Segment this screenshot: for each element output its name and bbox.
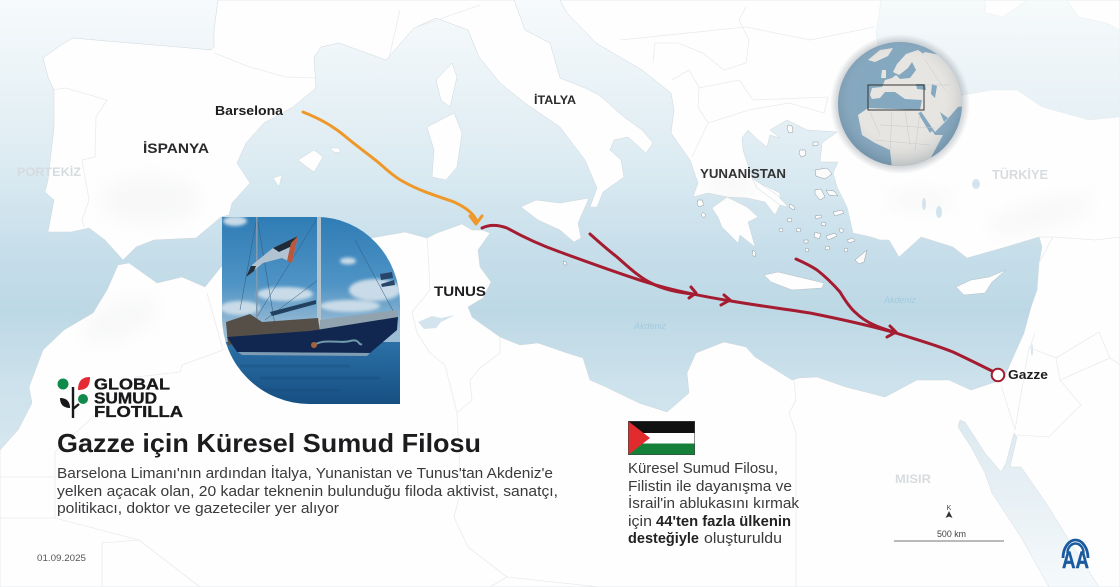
logo mark [58,377,90,418]
AA logo [1062,540,1089,574]
arrowhead 2 [721,295,730,305]
Black Sea [876,0,1120,120]
scale bar: 500 km [937,529,966,539]
Corsica and Sardinia [427,63,462,180]
support text: Filistin ile dayanışma ve [628,479,792,495]
support text: 44'ten fazla ülkenin [656,514,791,530]
label: İtalya: İTALYA [534,92,576,107]
Aegean islands [563,125,867,265]
label: Yunanistan: YUNANİSTAN [700,166,786,181]
support text: oluşturuldu [704,531,782,547]
orange route: Barselona to Tunus [303,112,482,224]
hull [227,317,398,353]
date: 01.09.2025 [37,553,86,564]
Palestinian flag on mast [246,236,298,277]
route from Tunus [482,225,992,371]
scale bar [894,529,1004,542]
lakes [418,179,1033,356]
support text: için [628,514,652,530]
logo: Global Sumud Flotilla [58,376,184,421]
logo: Global Sumud Flotilla: FLOTILLA [94,404,184,421]
Peloponnese [712,197,758,247]
support text [628,461,800,547]
description text: yelken açacak olan, 20 kadar teknenin bulunduğu filoda aktivist, sanatçı, [57,484,558,500]
description text: Barselona Limanı'nın ardından İtalya, Yunanistan ve Tunus'tan Akdeniz'e [57,464,553,482]
Gazze marker [992,369,1004,381]
icon: Palestinian flag [628,421,695,455]
support text: desteğiyle [628,531,699,547]
label: Akdeniz west: Akdeniz [633,321,666,331]
Evia [752,178,788,207]
route from Greece [796,259,894,332]
masts and rigging [240,217,398,325]
water [222,342,400,404]
support text: İsrail'in ablukasını kırmak [628,494,800,512]
label: Mısır: MISIR [895,472,931,486]
photo: flotilla boat [220,216,401,404]
terrain relief shading [76,171,1097,353]
arrowhead 3 [887,326,896,337]
AA logo: AA [1062,547,1089,574]
arrowhead 1 [689,287,696,298]
route from Italy [590,234,692,294]
globe focus rectangle [868,85,924,110]
north arrow: K [947,505,952,512]
Balearic islands [273,148,341,187]
label: Türkiye: TÜRKİYE [992,167,1048,182]
description text: politikacı, doktor ve gazeteciler yer alıyor [57,501,339,517]
support text: Küresel Sumud Filosu, [628,461,778,477]
north arrow [946,505,952,518]
label: Barselona: Barselona [215,103,284,118]
title: Gazze için Küresel Sumud Filosu [57,428,481,458]
Red Sea [958,420,1099,587]
logo wordmark: GLOBAL [94,376,170,394]
label: Gazze: Gazze [1008,367,1048,382]
label: Portekiz: PORTEKİZ [17,164,81,179]
Crete and Cyprus [764,270,1006,295]
label: İspanya: İSPANYA [143,140,209,156]
clouds [220,216,401,315]
label: Akdeniz east: Akdeniz [883,295,916,305]
red routes to Gazze [482,225,992,371]
deck and cabin [226,314,320,345]
logo: Global Sumud Flotilla: SUMUD [94,390,157,408]
Sicily [521,198,589,242]
label: Tunus: TUNUS [434,283,486,299]
description text [57,464,558,517]
locator globe [830,34,970,174]
